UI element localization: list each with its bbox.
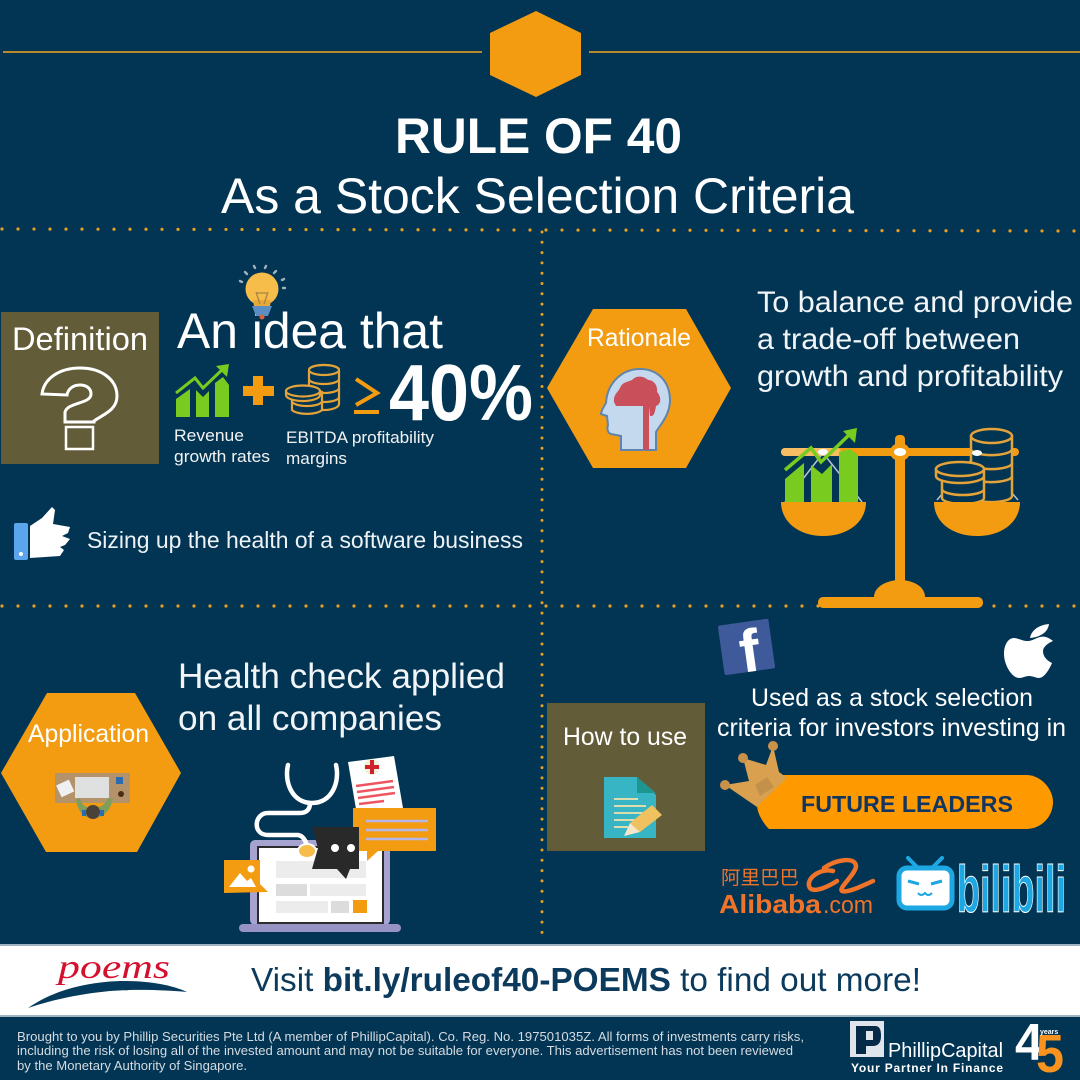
logo: poems: poems [55, 949, 170, 986]
logo: alibaba [719, 860, 873, 919]
icon: facebook: f [735, 616, 765, 686]
application badge [1, 693, 181, 852]
logo: alibaba: 阿里巴巴 [721, 867, 799, 889]
text: balance and trade-off: a trade-off between [757, 323, 1020, 356]
how to use badge [547, 703, 705, 851]
label: EBITDA profitability margins [286, 428, 434, 468]
panel: definition [1, 266, 533, 560]
illustration: laptop and stethoscope [224, 756, 436, 932]
icon: coins [286, 365, 339, 414]
illustration: balance scale [781, 428, 1020, 608]
rationale badge: Rationale [587, 324, 691, 352]
logo: 45 years: years [1040, 1029, 1058, 1036]
application badge: Application [28, 720, 149, 748]
icon: greater or equal sign [354, 379, 379, 412]
text: balance and trade-off [757, 286, 1073, 393]
icon: facebook [717, 615, 777, 688]
text: sizing up: Sizing up the health of a software business [87, 527, 523, 553]
label: EBITDA profitability margins: margins [286, 449, 347, 468]
definition badge: Definition [12, 320, 148, 357]
panel: application [1, 657, 505, 932]
title: RULE OF 40 [395, 108, 682, 164]
heading: an idea that: An idea that [177, 303, 443, 359]
label: revenue growth rates: growth rates [174, 447, 270, 466]
logo: poems [28, 949, 187, 1008]
icon: top hexagon [490, 11, 581, 97]
logo: PhillipCapital: Your Partner In Finance [851, 1061, 1003, 1075]
logo: alibaba: .com [823, 892, 873, 919]
logo: alibaba: Alibaba [719, 889, 822, 919]
text: balance and trade-off: To balance and provide [757, 286, 1073, 319]
decorative rules and dividers [3, 51, 482, 53]
logo: bilibili [899, 852, 1066, 926]
logo: 45 years: 4 [1015, 1014, 1043, 1072]
icon: growth chart [176, 364, 229, 417]
label: EBITDA profitability margins: EBITDA profitability [286, 428, 434, 447]
panel: rationale [547, 286, 1073, 608]
disclaimer: Brought to you by Phillip Securities Pte Ltd (A member of PhillipCapital). Co. Reg. No. 197501035Z. All forms of investments carry risks, [17, 1029, 804, 1044]
icon: plus [243, 376, 274, 405]
rationale badge [547, 309, 731, 468]
disclaimer: by the Monetary Authority of Singapore. [17, 1058, 247, 1073]
title: As a Stock Selection Criteria [221, 168, 854, 224]
text: health check: Health check applied [178, 657, 505, 696]
text: visit link: Visit bit.ly/ruleof40-POEMS to find out more! [251, 961, 921, 998]
logo: PhillipCapital: PhillipCapital [888, 1039, 1003, 1062]
panel: how to use [547, 615, 1066, 926]
text: health check [178, 657, 505, 738]
how to use badge: How to use [563, 723, 687, 751]
title [221, 108, 854, 224]
disclaimer: including the risk of losing all of the invested amount and may not be suitable for everyone. This advertisement has not been reviewed [17, 1043, 793, 1058]
text: used as a stock selection criteria: Used as a stock selection [751, 684, 1033, 712]
icon: apple [1004, 624, 1053, 678]
label: revenue growth rates [174, 426, 270, 466]
logo: 45 years [1015, 1014, 1064, 1080]
footer band: call to action [0, 944, 1080, 1017]
value: 40 percent: 40% [389, 348, 533, 437]
icon: thumbs up [14, 507, 70, 560]
logo: PhillipCapital [850, 1021, 1003, 1075]
banner: future leaders [720, 741, 1053, 829]
banner: future leaders: FUTURE LEADERS [801, 791, 1013, 817]
icon: light bulb [240, 266, 285, 320]
label: revenue growth rates: Revenue [174, 426, 244, 445]
text: used as a stock selection criteria: criteria for investors investing in [717, 714, 1066, 742]
disclaimer [17, 1029, 804, 1073]
definition badge [1, 312, 159, 464]
text: used as a stock selection criteria [717, 684, 1066, 742]
text: balance and trade-off: growth and profitability [757, 360, 1063, 393]
text: health check: on all companies [178, 699, 442, 738]
